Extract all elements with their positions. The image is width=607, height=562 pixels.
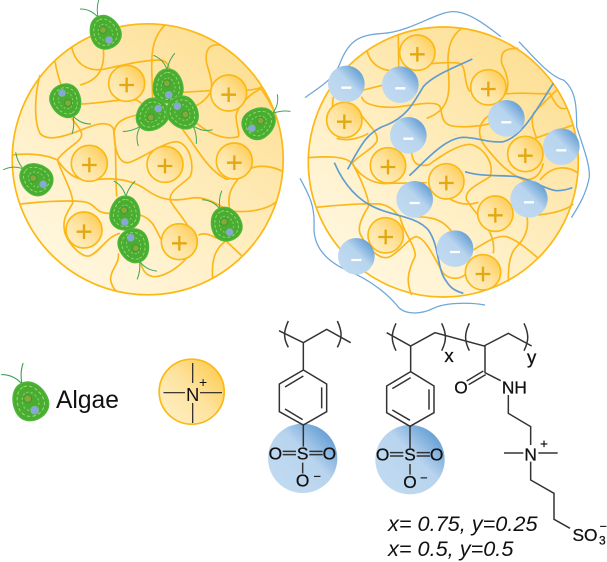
copolymer atom labels: 3 — [599, 533, 606, 547]
polymer network — [12, 25, 283, 292]
copolymer atom labels: y — [527, 346, 537, 367]
cationic groups — [327, 35, 543, 290]
panel: hydrogel with adhered algae — [0, 0, 295, 295]
copolymer atom labels: O — [403, 472, 417, 492]
legend: quaternary ammonium cation — [159, 359, 224, 424]
copolymer bonds — [387, 323, 570, 528]
panel: hydrogel with polyanion coating — [300, 12, 589, 313]
copolymer atom labels — [376, 345, 607, 547]
copolymer atom labels: SO — [572, 525, 598, 545]
structure: poly(styrene sulfonate) — [269, 321, 351, 491]
copolymer atom labels: + — [540, 436, 548, 451]
copolymer atom labels: N — [524, 444, 537, 464]
structure: copolymer — [376, 323, 607, 547]
PSS sulfonate labels — [269, 443, 336, 491]
icon: algae — [1, 363, 54, 426]
blue anion highlights — [268, 424, 445, 494]
cationic groups — [66, 65, 252, 260]
copolymer atom labels: x — [444, 345, 454, 366]
copolymer atom labels: − — [420, 471, 428, 485]
anionic groups — [328, 66, 580, 275]
PSS sulfonate labels: S — [297, 443, 308, 463]
ratio line 1: x= 0.75, y=0.25 — [387, 511, 538, 536]
PSS sulfonate labels: O — [269, 443, 282, 463]
polyanion chains — [300, 12, 589, 313]
PSS bonds — [279, 321, 351, 473]
algae cells on gel — [0, 0, 295, 281]
ratio line 2: x= 0.5, y=0.5 — [387, 536, 514, 561]
legend: algae icon and label — [1, 363, 119, 426]
polymer network — [307, 28, 578, 295]
copolymer atom labels: O — [376, 445, 389, 465]
composition ratios — [387, 511, 538, 561]
N+ label: N — [186, 384, 199, 405]
gel sphere background — [12, 24, 283, 295]
PSS sulfonate labels: O — [296, 471, 309, 491]
PSS sulfonate labels: O — [323, 443, 336, 463]
chemical structures — [268, 321, 607, 547]
methyl bonds — [164, 363, 222, 423]
gel sphere background — [308, 27, 578, 297]
label: Algae: Algae — [56, 387, 119, 414]
polymer network and coating — [300, 12, 589, 313]
copolymer atom labels: O — [454, 378, 468, 398]
PSS sulfonate labels: − — [314, 470, 321, 484]
copolymer atom labels: − — [600, 520, 607, 534]
cation circle — [159, 359, 224, 424]
plus sign: + — [199, 374, 207, 390]
copolymer atom labels: O — [430, 445, 443, 465]
copolymer atom labels: S — [404, 445, 416, 465]
copolymer atom labels: NH — [502, 378, 527, 398]
